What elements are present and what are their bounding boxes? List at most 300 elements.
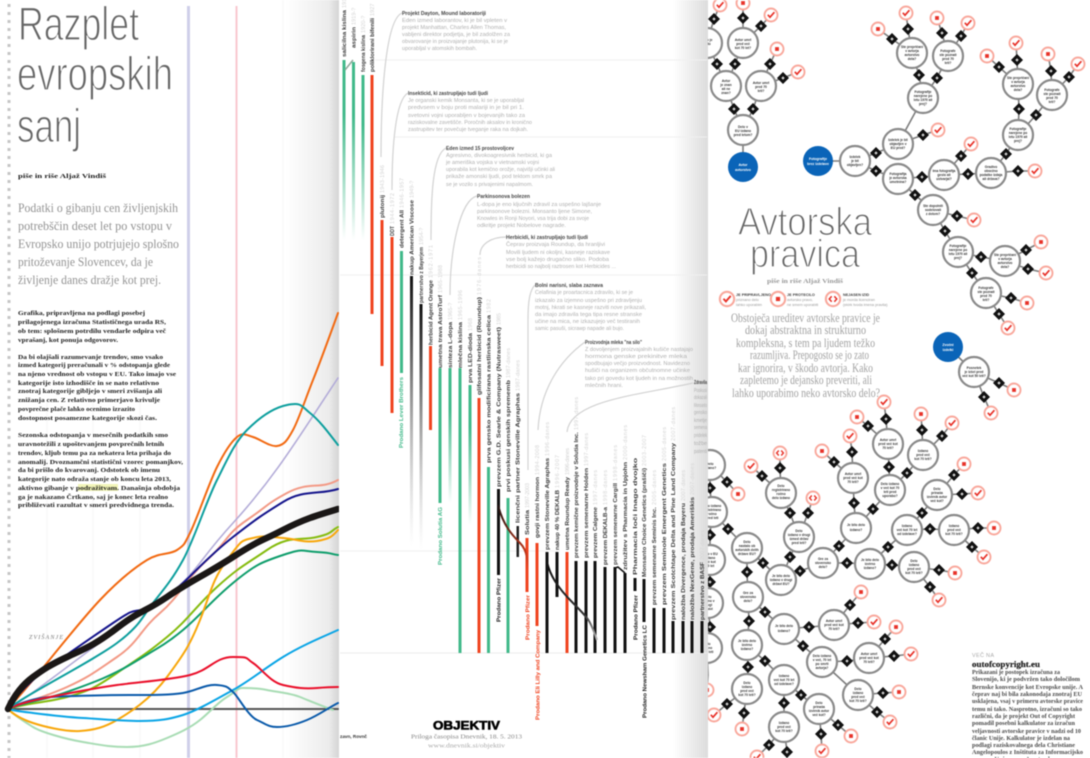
decision nodes: pred 70 bbox=[980, 294, 992, 298]
lede text: potrebščin deset let po vstopu v bbox=[18, 218, 172, 233]
rotated timeline labels: prevzem semenarne Cargill bbox=[613, 483, 619, 565]
decision nodes: državi EU? bbox=[772, 582, 790, 586]
title bbox=[17, 0, 173, 152]
decision node: Posnetek bbox=[967, 366, 981, 370]
body text: aktivno gibanje v podražitvam. Današnja obdobja bbox=[18, 485, 181, 492]
legend: free to use: priznano delo bbox=[736, 298, 759, 302]
start node: fotografije bbox=[803, 146, 833, 176]
body text: vprašanj, kot ponuja odgovorov. bbox=[18, 337, 118, 344]
rotated timeline labels: 2005-danes bbox=[662, 427, 668, 461]
decision nodes: pred več bbox=[740, 689, 754, 693]
decision nodes: od izdelave? bbox=[897, 532, 917, 536]
decision nodes: od izdelave? bbox=[774, 682, 794, 686]
rotated timeline labels: fosgena kislina bbox=[361, 34, 367, 72]
decision nodes: drugi bbox=[704, 603, 712, 607]
decision nodes: Avtor umrl bbox=[861, 652, 877, 656]
decision nodes: pred več bbox=[916, 453, 930, 457]
annotation: truncated note: Monsanto bbox=[694, 403, 707, 409]
decision nodes: Je bilo delo bbox=[861, 558, 879, 562]
decision nodes: 70 leti? bbox=[882, 446, 894, 450]
decision node bbox=[959, 357, 989, 387]
annotation: Projekt Dayton: uporabljal v atomskih bombah. bbox=[402, 46, 477, 52]
rotated timeline labels: 1997-danes bbox=[593, 470, 599, 505]
rotated timeline labels: 2007-danes bbox=[681, 470, 687, 501]
decision nodes: geslo ali bbox=[937, 173, 951, 177]
rotated timeline labels: 1997-danes bbox=[584, 433, 590, 466]
connectors bbox=[707, 402, 994, 758]
body text: znotraj kategorije gibljejo v smeri zvišanja ali bbox=[18, 388, 162, 395]
annotation: truncated note: tožbe bbox=[694, 441, 707, 447]
decision nodes bbox=[840, 38, 1067, 308]
decision nodes: Fotografe bbox=[978, 286, 994, 290]
rotated timeline labels: 1996-danes bbox=[545, 422, 551, 456]
annotation: Herbicidi: Movili ljudem ni okoljni, kasneje raziskave bbox=[506, 250, 610, 256]
source credit: zavn, Rovnč bbox=[340, 734, 368, 739]
decision nodes: narejene po bbox=[1009, 131, 1027, 135]
rotated timeline labels: prevzem semenarne Holden bbox=[584, 467, 590, 558]
decision nodes: pred več bbox=[907, 567, 921, 571]
decision nodes: prinaša bbox=[813, 705, 825, 709]
decision nodes: umetnina? bbox=[890, 180, 906, 184]
decision nodes: v avtorja bbox=[998, 257, 1012, 261]
body text: trendov, kljub temu pa za nekatera leta prihaja do bbox=[18, 450, 171, 457]
decision nodes: ste poznali bbox=[1043, 92, 1061, 96]
rotated timeline labels: 1965-1988 bbox=[438, 265, 444, 293]
start node: avtorska dela: avtorstvo bbox=[735, 168, 751, 172]
annotation: Eden izmed prostovoljcev bbox=[445, 146, 555, 188]
decision nodes: Izdelek je bil bbox=[888, 138, 908, 142]
decision nodes: po smrti bbox=[815, 662, 829, 666]
rotated timeline labels: 1997-2003 bbox=[525, 483, 531, 508]
body text: dostopnost posamezne kategorije skozi čas. bbox=[18, 415, 157, 422]
body text: Sezonska odstopanja v mesečnih podatkih smo bbox=[18, 432, 168, 439]
decision nodes: ustvarjal? bbox=[936, 177, 952, 181]
decision nodes: leti pred bbox=[884, 490, 896, 494]
decision nodes: avtorstvo bbox=[998, 261, 1012, 265]
annotation: truncated note: Poskusi bbox=[694, 388, 707, 394]
decision nodes: Fotografije bbox=[1009, 127, 1027, 131]
decision nodes: izdano bbox=[853, 691, 863, 695]
rotated timeline labels: herbicid Agent Orange bbox=[428, 280, 434, 345]
annotation: truncated note: pridelek bbox=[694, 433, 707, 439]
rotated timeline labels: prevzem Calgene bbox=[593, 507, 599, 558]
start node: fotografije: brez izdelave bbox=[807, 162, 829, 166]
sale labels: Prodano Pfizer bbox=[526, 594, 532, 640]
decision nodes: avtorja? bbox=[816, 666, 828, 670]
decision nodes: izšlo bbox=[703, 42, 711, 46]
body text: znižanja cen. Z relativno primerjavo krivulje bbox=[18, 397, 160, 404]
decision nodes: objavljen? bbox=[847, 163, 863, 167]
body text: izmed kategorij preračunali v % odstopanja glede bbox=[18, 362, 170, 369]
decision nodes: Delo bbox=[706, 462, 714, 466]
decision nodes: dela? bbox=[1014, 88, 1022, 92]
rotated timeline labels: naložba Divergence, prodaja Bayeru bbox=[681, 502, 687, 620]
decision nodes: pred leti bbox=[706, 516, 718, 520]
decision nodes: letu 1970 ali bbox=[1009, 135, 1027, 139]
decision nodes: Fotografije bbox=[914, 90, 932, 94]
decision tree: sound recordings bbox=[933, 332, 1020, 420]
decision nodes: pred več kot bbox=[878, 442, 899, 446]
decision nodes: Avtor umrl bbox=[880, 438, 896, 442]
decision nodes: Delo bbox=[703, 642, 711, 646]
body text: anomalij. Dvoznamčni statistični vzorec pomanjkov, bbox=[18, 459, 183, 466]
rotated timeline labels: glifosatni herbicid (Roundup) bbox=[477, 297, 483, 395]
legend: unclear: NEJASEN IZID bbox=[843, 293, 869, 297]
rotated timeline labels: prevzem kemične proizvodnje v Solutia Inc. bbox=[574, 432, 580, 558]
rotated timeline labels: 1954-? bbox=[419, 228, 425, 245]
panel: Avtorska pravica bbox=[692, 0, 1090, 758]
decision nodes: slovensko bbox=[815, 561, 831, 565]
decision nodes: pred več kot bbox=[859, 656, 880, 660]
decision nodes: Avtor umrl bbox=[826, 619, 842, 623]
rotated timeline labels: licenčni partner Stoneville Agraphas bbox=[516, 393, 522, 523]
decision nodes: Izdano bbox=[779, 721, 789, 725]
lede text: pritoževanje Slovencev, da je bbox=[18, 254, 153, 269]
start node: avtorska dela bbox=[728, 152, 758, 182]
decision nodes: več kot bbox=[704, 560, 717, 564]
rotated timeline labels: 1976-danes bbox=[477, 257, 483, 295]
decision nodes: z delom? bbox=[926, 212, 940, 216]
decision nodes: 70 let bbox=[706, 564, 715, 568]
rotated timeline labels: prva gensko modificirana rastlinska celica bbox=[486, 314, 492, 463]
outcome markers bbox=[700, 396, 1000, 758]
note: outofcopyright.eu: usklajena, vsaj v primeru avtorske pravice bbox=[972, 698, 1083, 705]
decision nodes: Avtor umrl bbox=[753, 81, 769, 85]
decision nodes: v avtorja bbox=[905, 49, 919, 53]
connectors bbox=[818, 13, 1078, 328]
rotated timeline labels: 1996-2007 bbox=[555, 455, 561, 488]
decision nodes: izdano bbox=[705, 556, 715, 560]
annotation: Projekt Dayton: Projekt Dayton, Mound laboratoriji bbox=[402, 11, 487, 17]
decision nodes: ročno bbox=[707, 512, 717, 516]
lede text: kar ignorira, v škodo avtorja. Kako bbox=[738, 360, 873, 375]
decision tree: published works bbox=[707, 394, 1002, 758]
decision nodes: Delo bbox=[910, 559, 918, 563]
decision nodes: pred leti bbox=[701, 650, 713, 654]
decision nodes: Delo bbox=[743, 681, 751, 685]
timeline bars bbox=[342, 60, 704, 653]
rotated timeline labels bbox=[342, 0, 706, 620]
rotated timeline labels: prevzem DEKALB-a bbox=[603, 506, 609, 565]
decision nodes: pred več bbox=[851, 695, 865, 699]
body text bbox=[18, 310, 183, 509]
decision nodes: Delo bbox=[854, 687, 862, 691]
annotation: Projekt Dayton bbox=[402, 11, 510, 52]
annotation: Parkinsonova bolezen: parkinsonove bolezni. Monsanto ljene Simone, bbox=[477, 209, 592, 215]
decision nodes: več kot 70 let bbox=[774, 678, 795, 682]
annotation: Insekticid bbox=[408, 91, 532, 133]
decision nodes: Fotografija bbox=[889, 172, 907, 176]
title: evropskih bbox=[17, 47, 173, 100]
rotated timeline labels: 1962-1971 bbox=[428, 245, 434, 278]
rotated timeline labels: 2007-danes bbox=[690, 463, 696, 495]
decision nodes: Izdano bbox=[949, 524, 959, 528]
body text: Grafika, pripravljena na podlagi posebej bbox=[18, 310, 145, 317]
masthead: Objektiv: Priloga časopisa Dnevnik, 18. 5. 2013 bbox=[411, 734, 522, 740]
title: pravica bbox=[750, 233, 860, 276]
lede text: Obstoječa ureditev avtorske pravice je bbox=[731, 310, 880, 325]
note: outofcopyright.eu: Bernske konvencije kot Evropske unije. A bbox=[972, 684, 1083, 691]
note: outofcopyright.eu: podlagi raziskovalnega dela Christiane bbox=[972, 742, 1075, 749]
decision nodes: državi bbox=[703, 607, 713, 611]
note: outofcopyright.eu: outofcopyright.eu bbox=[972, 660, 1041, 669]
annotation: Bolni narisni bbox=[535, 283, 646, 332]
decision nodes: dela? bbox=[1001, 265, 1009, 269]
decision nodes: izmed držav bbox=[790, 537, 809, 541]
rotated timeline labels: 2007-danes bbox=[700, 530, 706, 560]
decision nodes: uporabo? bbox=[882, 494, 898, 498]
legend: protected: avtorsko pravo, bbox=[787, 298, 813, 302]
decision nodes: leti? bbox=[983, 298, 989, 302]
panel: Monsanto timeline bbox=[339, 0, 708, 758]
decision nodes: ročno bbox=[776, 492, 786, 496]
decision nodes: nastalo ob bbox=[739, 544, 755, 548]
lede text: življenje danes dražje kot prej. bbox=[18, 272, 161, 287]
annotation: truncated note: patenti bbox=[694, 449, 707, 455]
decision nodes: Avtor umrl bbox=[735, 38, 751, 42]
rotated timeline labels: mlečna kislina bbox=[458, 321, 464, 368]
rotated timeline labels: združitev s Pharmacia in Upjohn bbox=[623, 461, 629, 570]
annotation: Bolni narisni: izkazalo za izjemno uspešno pri zdravljenju bbox=[535, 298, 642, 304]
lede text: kompleksna, s tem pa ljudem težko bbox=[736, 335, 875, 350]
decision nodes: Delo izdano bbox=[881, 482, 899, 486]
legend: protected: JE PROTECILO bbox=[787, 293, 815, 297]
rotated timeline labels: Solutia bbox=[525, 509, 531, 535]
rotated timeline labels: 1985 bbox=[496, 313, 502, 325]
rotated timeline labels: govji rastni hormon bbox=[535, 476, 541, 538]
legend: protected: ne smem uporabiti bbox=[787, 303, 818, 307]
decision nodes: Delo v EU bbox=[702, 552, 718, 556]
sale labels: Prodano Pfizer bbox=[496, 577, 502, 622]
rotated timeline labels: nakup American Viscose bbox=[410, 200, 416, 275]
decision nodes: kot 70 leti? bbox=[849, 699, 867, 703]
decision nodes: izvirno bbox=[742, 643, 752, 647]
annotation: Insekticid: predvsem v boju proti malariji in je bil pri 1. bbox=[408, 105, 524, 111]
annotation: Eden izmed prostovoljcev: Agresivno, divokoagresivnik herbicid, ki ga bbox=[446, 153, 552, 159]
decision nodes: kot 70 leti? bbox=[945, 532, 963, 536]
decision nodes: Avtor umrl bbox=[845, 472, 861, 476]
annotation: Projekt Dayton: obvarovanje in proizvajanje plutonija, ki se je bbox=[402, 39, 508, 45]
rotated timeline labels: Monsanto Choice Genetics (prašiči) bbox=[642, 468, 648, 577]
rotated timeline labels: 1949-? bbox=[410, 181, 416, 198]
start node: posnetki: Zvočni bbox=[942, 343, 954, 347]
decision nodes: izvirno bbox=[865, 562, 875, 566]
decision nodes: je znan bbox=[719, 83, 732, 87]
decision nodes: Je bilo delo bbox=[847, 523, 865, 527]
annotation: Projekt Dayton: vabljeni direktor podjetja, je bil zadolžen za bbox=[402, 32, 510, 38]
annotation: truncated note: kmetje bbox=[694, 418, 707, 424]
rotated timeline labels: 1982 bbox=[486, 299, 492, 313]
decision nodes: Delo je bbox=[702, 38, 713, 42]
annotation: Insekticid: svetovni vojni uporabljen v bojevanjih tako za bbox=[408, 113, 525, 119]
body text: na njeno vrednost ob vstopu v EU. Tako imajo vse bbox=[18, 371, 176, 378]
annotation: Proizvodnja mleka na silo: hormona genske prekinitve mleka bbox=[585, 354, 687, 360]
annotation: Eden izmed prostovoljcev: uporabila kot kemično orožje, najvišji učinki ali bbox=[446, 167, 555, 173]
decision nodes: Fotografe bbox=[940, 49, 956, 53]
decision tree: anonymous works bbox=[707, 0, 806, 183]
decision nodes: ste poznali bbox=[977, 290, 995, 294]
annotation: Herbicidi bbox=[506, 235, 616, 270]
lede text: Evropsko unijo potrjujejo splošno bbox=[18, 236, 179, 251]
decision nodes bbox=[707, 427, 971, 744]
body text: uravnotežili z upoštevanjem povprečnih letnih bbox=[18, 441, 165, 448]
decision nodes: izdano? bbox=[864, 566, 876, 570]
rotated timeline labels: 1998-danes bbox=[603, 470, 609, 505]
rotated timeline labels: prvi poskusi genskih sprememb bbox=[506, 379, 512, 492]
decision nodes: Delo bbox=[777, 484, 785, 488]
body text: ga je nakazano Črtkano, saj je konec leta realno bbox=[18, 493, 168, 501]
annotation: Proizvodnja mleka na silo bbox=[585, 340, 693, 389]
rotated timeline labels: prevzem G.D. Searle & Company (Nutrasweet) bbox=[496, 327, 502, 487]
rotated timeline labels: prevzem semenarne Seminis Inc. bbox=[652, 507, 658, 605]
decision nodes: države EU? bbox=[738, 552, 756, 556]
body text: prilagojenega izračuna Statističnega urada RS, bbox=[18, 319, 166, 326]
note: outofcopyright.eu: Angelopoulos z Inštituta za Informacijsko bbox=[972, 749, 1083, 756]
decision nodes: Fotografije bbox=[949, 244, 967, 248]
annotation: Eden izmed prostovoljcev: Eden izmed 15 prostovoljcev bbox=[446, 146, 514, 152]
decision nodes: registrirano bbox=[772, 488, 790, 492]
decision nodes: Delo bbox=[815, 701, 823, 705]
decision nodes: izdano bbox=[702, 646, 712, 650]
note: outofcopyright.eu: Slovenijo, ki je podvržen tako določilom bbox=[972, 676, 1081, 683]
decision nodes: Avtor bbox=[722, 79, 731, 83]
annotation: Bolni narisni: Bolni narisni, slaba zaznava bbox=[535, 283, 603, 289]
body text: ob tem: splošnem potrdilu vendarle odpira več bbox=[18, 328, 166, 335]
decision nodes: pred več bbox=[736, 42, 750, 46]
note: outofcopyright.eu: pomadil posebni kalkulator za izračun bbox=[972, 720, 1075, 727]
decision node: je izšel pred bbox=[964, 370, 983, 374]
title bbox=[738, 201, 872, 276]
sale labels: Prodano Solutia AG bbox=[438, 506, 444, 565]
legend: free to use bbox=[720, 292, 771, 307]
sale labels: Prodano Newsham Genetics LC bbox=[642, 624, 648, 718]
decision tree: photographs bbox=[803, 6, 1084, 334]
decision nodes: slovensko bbox=[740, 595, 756, 599]
decision node: več kot 50 leti? bbox=[962, 374, 986, 378]
decision nodes: dela? bbox=[908, 57, 916, 61]
decision nodes: prej? bbox=[1014, 139, 1022, 143]
decision nodes: Delo bbox=[704, 595, 712, 599]
annotation: Bolni narisni: motnj, hkrati se kasneje razviti nove prikazali, bbox=[535, 305, 646, 311]
decision nodes: pred več bbox=[947, 528, 961, 532]
decision nodes: izvirnik avtor bbox=[927, 495, 948, 499]
decision nodes: pred več kot bbox=[843, 476, 864, 480]
decision nodes: pred več kot bbox=[824, 623, 845, 627]
decision nodes: kot 70 leti? bbox=[775, 729, 793, 733]
decision nodes: Je bilo delo bbox=[738, 639, 756, 643]
note: outofcopyright.eu: različni, da je projekt Out of Copyright bbox=[972, 713, 1076, 720]
decision nodes: pred letom? bbox=[734, 133, 752, 137]
decision nodes: ste poznali bbox=[939, 53, 957, 57]
rotated timeline labels: 1919-? bbox=[352, 8, 358, 25]
annotation: Insekticid: Je organski kemik Monsanta, ki se je uporabljal bbox=[408, 98, 524, 104]
rotated timeline labels: prevzem Seminole Emergent Genetics bbox=[662, 463, 668, 605]
body text: kategorije nato odraža stanje ob koncu leta 2013, bbox=[18, 476, 171, 483]
start node: avtorska dela: Avtor bbox=[738, 163, 748, 167]
rotated timeline labels: 1987-danes bbox=[516, 360, 522, 391]
decision nodes: pred 70 bbox=[1046, 96, 1058, 100]
annotation: truncated note: semena bbox=[694, 425, 707, 431]
sale labels: Prodano Pfizer bbox=[634, 594, 640, 640]
note: outofcopyright.eu: čeprav naj bi bila zakonodaja znotraj EU bbox=[972, 691, 1082, 698]
decision nodes: več kot 70 let bbox=[897, 528, 918, 532]
annotation: Eden izmed prostovoljcev: se je vozilo s privajenimi napalmom. bbox=[446, 182, 533, 188]
rotated timeline labels: partnerstvo z Bayerjem bbox=[419, 247, 425, 303]
lede text: razumljiva. Prepogosto se jo zato bbox=[750, 347, 869, 362]
annotation: truncated note: Zdravila bbox=[694, 380, 707, 386]
rotated timeline labels: 1946-1957 bbox=[400, 178, 406, 208]
decision nodes: avtorstvo bbox=[1011, 84, 1025, 88]
rotated timeline labels: 1998-danes bbox=[613, 445, 619, 481]
rotated timeline labels: salicilna kislina bbox=[342, 9, 348, 57]
decision nodes: Izdelek bbox=[850, 155, 861, 159]
rotated timeline labels: 1994-2008 bbox=[535, 445, 541, 475]
rotated timeline labels: 2000-danes bbox=[623, 425, 629, 460]
legend: free to use: JE PRIPRAVLJENO bbox=[736, 293, 771, 297]
decision nodes: Izdano bbox=[902, 524, 912, 528]
decision nodes: sodelovali bbox=[925, 208, 941, 212]
annotation: Parkinsonova bolezen: Knowles in Ronji Noyori, vsa trija dobi za svoje bbox=[477, 216, 589, 222]
decision nodes: leti? bbox=[758, 89, 764, 93]
start node: fotografije: Fotografije bbox=[809, 157, 827, 161]
decision nodes: izdano v bbox=[701, 599, 715, 603]
annotation: Herbicidi: Čeprav proizvaja Roundup, da hranljivi bbox=[506, 241, 605, 248]
body text: Da bi olajšali razumevanje trendov, smo vsako bbox=[18, 354, 163, 361]
decision nodes: leti? bbox=[945, 61, 951, 65]
rotated timeline labels: prevzem Stoneville Agraphas bbox=[545, 458, 551, 550]
annotation: Proizvodnja mleka na silo: tako pri govedu kot ljudeh in na možnostih bbox=[585, 376, 693, 382]
annotation connectors bbox=[381, 13, 693, 470]
annotation: truncated note: dokazali bbox=[694, 395, 707, 401]
lede text: zapletemo je dejansko preveriti, ali bbox=[740, 372, 872, 387]
decision nodes: 70 leti? bbox=[863, 660, 875, 664]
decision nodes: pred 70 bbox=[755, 85, 767, 89]
axis label: zvišanje: ZVIŠANJE bbox=[29, 633, 63, 641]
decision nodes: je bil bbox=[850, 159, 859, 163]
rotated timeline labels: poliklorirani bifenili bbox=[370, 18, 376, 72]
decision nodes: pred več bbox=[777, 725, 791, 729]
decision nodes: izvirnik avtor bbox=[809, 709, 830, 713]
decision nodes: Gre za bbox=[818, 557, 828, 561]
annotation: Parkinsonova bolezen: odkritje projekt Nobelove nagrade. bbox=[477, 223, 566, 229]
note: outofcopyright.eu: članic Unije. Kalkulator je izdelan na bbox=[972, 735, 1071, 742]
decision nodes: v več, 70 let bbox=[813, 658, 832, 662]
outcome markers bbox=[708, 0, 804, 115]
rotated timeline labels: 1944-1972 bbox=[390, 193, 396, 224]
decision nodes: znan? bbox=[721, 91, 731, 95]
masthead: Objektiv: www.dnevnik.si/objektiv bbox=[428, 742, 506, 750]
decision nodes: narejene po bbox=[914, 94, 932, 98]
legend: free to use: lahko uporabim bbox=[736, 303, 762, 307]
decision nodes: Je bilo delo bbox=[772, 574, 790, 578]
lede text: Podatki o gibanju cen življenjskih bbox=[18, 200, 178, 215]
annotation: Proizvodnja mleka na silo: Proizvodnja mleka "na silo" bbox=[585, 340, 642, 346]
decision nodes: v avtorja bbox=[1011, 80, 1025, 84]
note: outofcopyright.eu bbox=[972, 652, 1083, 758]
rotated timeline labels: Pharmacia loči Inago dvojko bbox=[633, 457, 639, 575]
decision nodes: izdano? bbox=[850, 528, 862, 532]
decision nodes: Delo bbox=[743, 540, 751, 544]
rotated timeline labels: 1927 bbox=[370, 4, 376, 16]
decision nodes: kot 70 leti? bbox=[914, 457, 932, 461]
decision nodes: izdano? bbox=[704, 466, 716, 470]
annotation: Proizvodnja mleka na silo: mlečnih hrani. bbox=[585, 383, 623, 389]
decision nodes: je avtorska bbox=[888, 176, 907, 180]
annotation: Parkinsonova bolezen: L-dopa je eno ključnih zdravil za uspešno lajšanje bbox=[477, 202, 601, 208]
decision nodes: delo izdano bbox=[772, 496, 790, 500]
decision nodes: avtorskih delih bbox=[735, 548, 759, 552]
rotated timeline labels: sinteza L-dopa bbox=[448, 321, 454, 368]
